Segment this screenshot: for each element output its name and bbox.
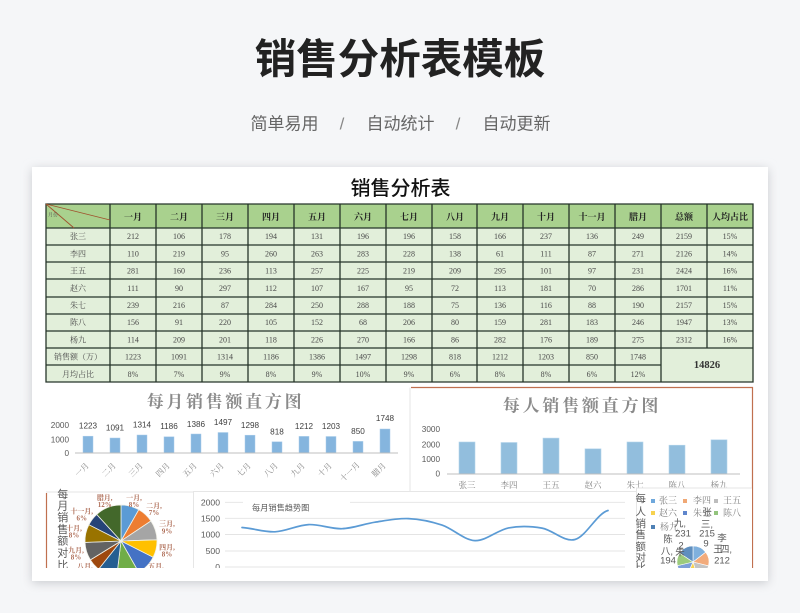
name axis labels: 杨九 (710, 480, 728, 490)
table header row: 八月 (446, 212, 464, 222)
table body rows: 2157 (676, 301, 692, 310)
data labels: 1186 (160, 422, 178, 431)
y axis labels: 0 (64, 449, 69, 458)
month axis labels: 六月 (207, 460, 226, 479)
table body rows: 282 (494, 336, 506, 344)
table body rows: 13% (723, 318, 738, 327)
y axis labels: 1500 (201, 513, 220, 523)
table body rows: 220 (219, 318, 231, 327)
diagonal header cell: 月份 (48, 212, 58, 218)
table body rows: 1497 (355, 352, 371, 362)
table body rows: 166 (494, 232, 506, 241)
pie labels (66, 493, 175, 571)
table body rows: 176 (540, 336, 552, 344)
y axis labels (201, 497, 220, 572)
legend: 朱七 (693, 507, 711, 518)
table body rows: 136 (494, 301, 506, 310)
table body rows: 116 (540, 301, 552, 310)
month axis labels: 九月 (288, 460, 307, 479)
table body rows: 7% (174, 370, 185, 379)
overlapping pie labels: 212 (714, 556, 730, 566)
data labels: 1748 (376, 414, 395, 423)
data labels: 818 (270, 428, 284, 436)
table body rows: 297 (219, 284, 231, 293)
table body rows: 86 (451, 336, 459, 344)
pie labels: 四月, (159, 544, 175, 552)
table body rows: 赵六 (70, 283, 87, 293)
name axis labels: 赵六 (584, 480, 602, 490)
table body rows: 1386 (309, 352, 325, 362)
pie labels: 12% (98, 501, 112, 509)
table body rows: 1203 (538, 352, 554, 362)
data labels: 850 (351, 427, 365, 436)
table body rows: 219 (173, 249, 185, 258)
trend line title (243, 499, 350, 512)
y axis labels: 500 (206, 546, 220, 556)
month axis labels: 一月 (73, 461, 91, 479)
month axis labels (73, 460, 388, 484)
table header row: 四月 (262, 212, 280, 222)
table body rows: 8% (495, 370, 506, 379)
table body rows: 136 (586, 232, 598, 241)
overlapping pie labels: 李 (717, 532, 727, 544)
table body rows: 257 (311, 267, 323, 276)
pie labels: 8% (69, 532, 79, 540)
y axis labels (51, 421, 69, 458)
table body rows: 275 (632, 336, 644, 344)
month axis labels: 八月 (262, 461, 280, 479)
table body rows: 219 (403, 267, 415, 276)
pie labels: 三月, (159, 520, 175, 528)
overlapping pie labels: 九, (674, 518, 686, 530)
table body rows: 1212 (492, 352, 508, 362)
table body rows: 183 (586, 318, 598, 327)
table body rows: 118 (265, 336, 277, 344)
month axis labels: 十月 (315, 460, 334, 479)
table body rows: 111 (127, 284, 139, 293)
table body rows: 9% (404, 370, 415, 379)
table body rows: 销售额（万） (54, 352, 102, 362)
table body rows: 228 (403, 249, 415, 258)
table body rows: 68 (359, 318, 367, 327)
table body rows: 1748 (630, 352, 646, 362)
subtitle: / (340, 114, 345, 134)
table body rows: 188 (403, 301, 415, 310)
table body rows: 2424 (676, 267, 692, 276)
table header row: 五月 (308, 212, 326, 222)
table body rows: 271 (632, 249, 644, 258)
month axis labels: 腊月 (369, 460, 388, 479)
table body rows: 209 (449, 267, 461, 276)
vertical pie title: 售 (57, 522, 68, 536)
table body rows: 9% (220, 370, 231, 379)
table header row: 腊月 (629, 211, 647, 222)
table body rows: 107 (311, 284, 323, 293)
overlapping pie labels: 215 (699, 528, 715, 540)
trend line title: 每月销售趋势图 (252, 502, 309, 512)
table body rows (54, 232, 738, 379)
table body rows: 850 (586, 352, 598, 362)
data labels: 1091 (106, 424, 125, 432)
table body rows: 1298 (401, 352, 417, 362)
overlapping pie labels: 陈 (663, 534, 673, 546)
table body rows: 236 (219, 267, 231, 276)
month axis labels: 十一月 (338, 460, 362, 484)
table header row: 总额 (675, 211, 694, 222)
y axis labels: 1000 (51, 436, 69, 444)
pie labels: 二月, (146, 502, 162, 510)
table body rows: 178 (219, 232, 231, 241)
sales table (46, 204, 753, 382)
table body rows: 1314 (217, 352, 233, 362)
table body rows: 2159 (676, 232, 692, 241)
table body rows: 朱七 (70, 300, 86, 310)
vertical pie title: 每 (635, 492, 646, 505)
data labels: 1497 (214, 418, 233, 427)
month axis labels: 五月 (181, 461, 199, 479)
subtitle: 简单易用 (250, 114, 318, 134)
chart: monthly share pie (46, 488, 193, 568)
y axis labels: 1000 (201, 530, 220, 540)
table body rows: 8% (541, 370, 552, 379)
vertical pie title: 对 (635, 551, 646, 564)
bars (459, 438, 727, 474)
table body rows: 166 (403, 336, 415, 344)
table body rows: 1947 (676, 318, 692, 327)
table body rows: 11% (723, 284, 738, 293)
table body rows: 105 (265, 318, 277, 327)
legend (651, 495, 741, 532)
vertical pie title: 比 (635, 561, 646, 574)
table body rows: 陈八 (70, 317, 86, 327)
data labels: 1314 (133, 420, 152, 430)
legend: 李四 (693, 495, 711, 506)
table body rows: 16% (723, 267, 738, 276)
chart title: 每月销售额直方图 (147, 392, 304, 412)
subtitle (250, 114, 550, 134)
table header row: 九月 (491, 211, 509, 222)
table body rows: 1223 (125, 352, 141, 362)
pie labels: 9% (162, 528, 172, 536)
pie slices (84, 504, 158, 568)
table body rows: 88 (588, 301, 596, 310)
subtitle: 自动统计 (366, 114, 434, 134)
table body rows: 16% (723, 336, 738, 344)
table body rows: 张三 (70, 232, 86, 241)
table body rows: 201 (219, 336, 231, 344)
diagonal header cell (46, 204, 110, 228)
table body rows: 2126 (676, 249, 692, 258)
chart: per-person sales column chart (410, 388, 752, 568)
name axis labels: 朱七 (626, 480, 644, 490)
overlapping pie labels: 194 (660, 556, 676, 566)
table body rows: 283 (357, 249, 369, 258)
table body rows: 189 (586, 336, 598, 344)
table header row: 十一月 (578, 211, 606, 222)
table body rows: 113 (265, 267, 277, 276)
table body rows: 212 (127, 232, 139, 241)
table body rows: 106 (173, 232, 185, 241)
table title: 销售分析表 (350, 177, 450, 200)
month axis labels: 二月 (100, 461, 118, 479)
table body rows: 8% (128, 370, 139, 379)
vertical pie title: 每 (57, 487, 68, 501)
name axis labels: 陈八 (668, 480, 686, 490)
chart: monthly trend line (193, 492, 636, 572)
table body rows: 杨九 (70, 334, 86, 344)
overlapping pie labels: 四, (720, 544, 732, 556)
table body rows: 80 (451, 318, 459, 327)
table body rows: 87 (221, 301, 229, 310)
table header row: 人均占比 (712, 211, 748, 222)
table body rows: 2312 (676, 336, 692, 344)
table body rows: 190 (632, 301, 644, 310)
overlapping pie labels: 王 (713, 544, 723, 556)
subtitle: 自动更新 (482, 114, 550, 134)
table body rows: 75 (451, 301, 459, 310)
table body rows: 110 (127, 249, 139, 258)
table body rows: 260 (265, 249, 277, 258)
legend: 陈八 (723, 507, 741, 518)
table body rows: 6% (587, 370, 598, 379)
table body rows: 138 (449, 249, 461, 258)
name axis labels: 李四 (500, 480, 518, 490)
pie labels: 十一月, (70, 507, 93, 516)
month axis labels: 七月 (234, 460, 253, 479)
table header row: 三月 (216, 212, 234, 222)
vertical pie title (636, 493, 646, 568)
table header row: 十月 (537, 211, 555, 222)
table body rows: 281 (127, 267, 139, 276)
vertical pie title: 销 (635, 517, 646, 530)
table body rows: 101 (540, 267, 552, 276)
vertical pie title: 额 (635, 540, 646, 553)
table body rows: 249 (632, 232, 644, 241)
table body rows: 167 (357, 284, 369, 293)
table body rows: 156 (127, 318, 139, 327)
data labels: 1223 (79, 422, 98, 430)
subtitle: / (456, 114, 461, 134)
chart: per-person share pie (636, 488, 752, 568)
vertical pie title: 售 (635, 528, 646, 541)
overlapping pie labels (660, 508, 732, 566)
vertical pie title: 额 (57, 535, 68, 548)
table body rows: 6% (450, 370, 461, 379)
data labels: 1298 (241, 421, 260, 430)
y axis labels: 2000 (201, 497, 220, 507)
pie labels: 十月, (66, 523, 82, 532)
table body rows: 295 (494, 267, 506, 276)
vertical pie title: 销 (57, 510, 68, 524)
y axis labels: 1000 (422, 455, 440, 464)
table body rows: 181 (540, 284, 552, 293)
table body rows: 114 (127, 336, 139, 344)
table body rows: 113 (494, 284, 506, 293)
grand total: 14826 (694, 360, 720, 371)
pie labels: 8% (129, 501, 139, 509)
table body rows: 1091 (171, 352, 187, 362)
overlapping pie labels: 张 (702, 508, 712, 518)
table body rows: 246 (632, 318, 644, 327)
vertical pie title: 对 (57, 545, 68, 559)
table body rows: 95 (221, 249, 229, 258)
table body rows: 281 (540, 318, 552, 327)
table body rows: 12% (631, 370, 646, 379)
table body rows: 111 (540, 249, 552, 258)
table body rows: 10% (356, 370, 371, 379)
bars (83, 429, 390, 453)
table body rows: 250 (311, 301, 323, 310)
data labels (79, 414, 395, 436)
table body rows: 14% (723, 249, 738, 258)
table body rows: 王五 (70, 267, 86, 276)
table header row (124, 211, 748, 222)
table body rows: 15% (723, 301, 738, 310)
pie labels: 腊月, (97, 493, 113, 502)
table body rows: 8% (266, 370, 277, 379)
overlapping pie labels: 2 (678, 540, 684, 552)
name axis labels: 张三 (458, 480, 476, 490)
table header row: 一月 (124, 212, 142, 222)
month axis labels: 三月 (127, 461, 145, 479)
legend: 张三 (659, 496, 677, 506)
table body rows: 152 (311, 318, 323, 327)
table body rows: 286 (632, 284, 644, 293)
table body rows: 70 (588, 284, 596, 293)
table body rows: 李四 (70, 248, 86, 258)
table body rows: 196 (403, 232, 415, 241)
pie labels: 一月, (126, 494, 142, 502)
table body rows: 1701 (676, 284, 692, 293)
small pie slices (677, 546, 709, 568)
table header row: 二月 (170, 212, 188, 222)
panel: spreadsheet card (32, 167, 768, 581)
overlapping pie labels: 八, (661, 546, 673, 558)
table body rows: 9% (312, 370, 323, 379)
table body rows: 月均占比 (62, 369, 94, 379)
table body rows: 818 (449, 352, 461, 362)
table body rows: 15% (723, 232, 738, 241)
table body rows: 72 (451, 284, 459, 293)
table body rows: 91 (175, 318, 183, 327)
table body rows: 226 (311, 336, 323, 344)
y axis labels: 0 (435, 470, 440, 478)
table body rows: 284 (265, 301, 277, 310)
table body rows: 87 (588, 249, 596, 258)
table body rows: 61 (496, 249, 504, 258)
table body rows: 160 (173, 267, 185, 276)
overlapping pie labels: 9 (703, 538, 709, 550)
y axis labels (422, 425, 440, 478)
table body rows: 159 (494, 318, 506, 327)
table body rows: 263 (311, 249, 323, 258)
name axis labels (458, 480, 728, 490)
data labels: 1386 (187, 420, 206, 429)
table body rows: 209 (173, 336, 185, 344)
pie labels: 6% (76, 514, 87, 522)
table body rows: 216 (173, 301, 185, 310)
pie labels: 九月, (68, 546, 84, 555)
vertical pie title: 比 (57, 559, 68, 572)
vertical pie title: 月 (57, 501, 68, 513)
overlapping pie labels: 231 (675, 528, 691, 540)
table body rows: 1186 (263, 352, 279, 362)
legend: 王五 (723, 496, 741, 506)
pie labels: 8% (71, 553, 81, 561)
card shadow (32, 169, 768, 583)
vertical pie title: 人 (635, 506, 646, 518)
title: 销售分析表模板 (255, 36, 545, 82)
pie labels: 8% (162, 550, 172, 558)
legend: 赵六 (659, 507, 678, 518)
trend line (242, 510, 608, 541)
name axis labels: 王五 (542, 480, 560, 490)
table header row: 六月 (354, 211, 372, 222)
table body rows: 90 (175, 284, 183, 293)
y axis labels: 0 (215, 562, 220, 572)
table body rows: 206 (403, 318, 415, 327)
vertical pie title (58, 488, 68, 568)
pie labels: 7% (149, 509, 159, 517)
data labels: 1203 (322, 422, 341, 431)
table body rows: 131 (311, 232, 323, 241)
table body rows: 225 (357, 267, 369, 276)
table body rows: 112 (265, 284, 277, 293)
table body rows: 239 (127, 301, 139, 310)
overlapping pie labels: 三, (701, 520, 713, 530)
table body rows: 97 (588, 267, 596, 276)
pie labels: 五月, (148, 563, 164, 571)
table body rows: 95 (405, 284, 413, 293)
table body rows: 194 (265, 232, 277, 241)
y axis labels: 2000 (51, 421, 69, 430)
table body rows: 231 (632, 267, 644, 276)
table header row: 七月 (400, 212, 418, 222)
table body rows: 288 (357, 301, 369, 310)
y axis labels: 3000 (422, 425, 440, 434)
legend: 杨九 (660, 521, 678, 532)
table body rows: 237 (540, 232, 552, 241)
pie labels: 八月, (77, 563, 93, 571)
y axis labels: 2000 (422, 440, 440, 449)
month axis labels: 四月 (154, 461, 172, 479)
chart: monthly sales column chart (51, 392, 398, 484)
table body rows: 196 (357, 232, 369, 241)
data labels: 1212 (295, 422, 314, 431)
overlapping pie labels: 朱 (675, 546, 685, 558)
table body rows: 270 (357, 336, 369, 344)
table body rows: 158 (449, 232, 461, 241)
chart title: 每人销售额直方图 (503, 396, 661, 416)
